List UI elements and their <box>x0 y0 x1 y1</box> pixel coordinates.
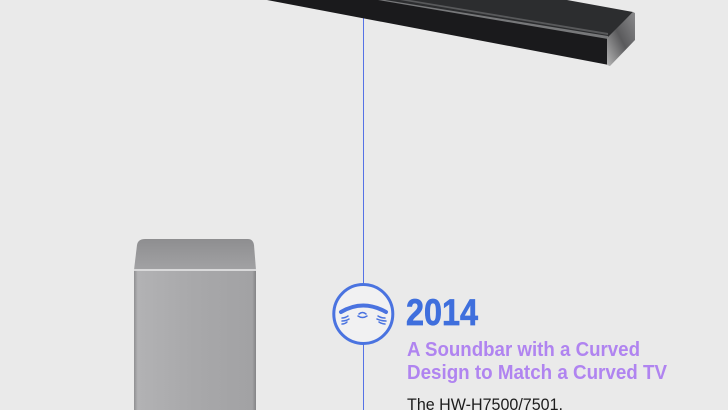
timeline icon: soundbar waves <box>334 284 393 344</box>
subwoofer <box>134 239 256 410</box>
soundbar front face <box>267 0 609 65</box>
year heading: 2014 <box>406 292 478 333</box>
subtitle: A Soundbar with a Curved <box>407 338 640 361</box>
soundbar <box>267 0 635 66</box>
subtitle: Design to Match a Curved TV <box>407 361 667 384</box>
timeline line <box>363 16 364 410</box>
subwoofer front face <box>134 270 256 410</box>
soundbar top face <box>383 0 633 38</box>
subwoofer top face <box>134 239 256 270</box>
subtitle <box>407 338 667 384</box>
soundbar end cap <box>607 12 635 66</box>
